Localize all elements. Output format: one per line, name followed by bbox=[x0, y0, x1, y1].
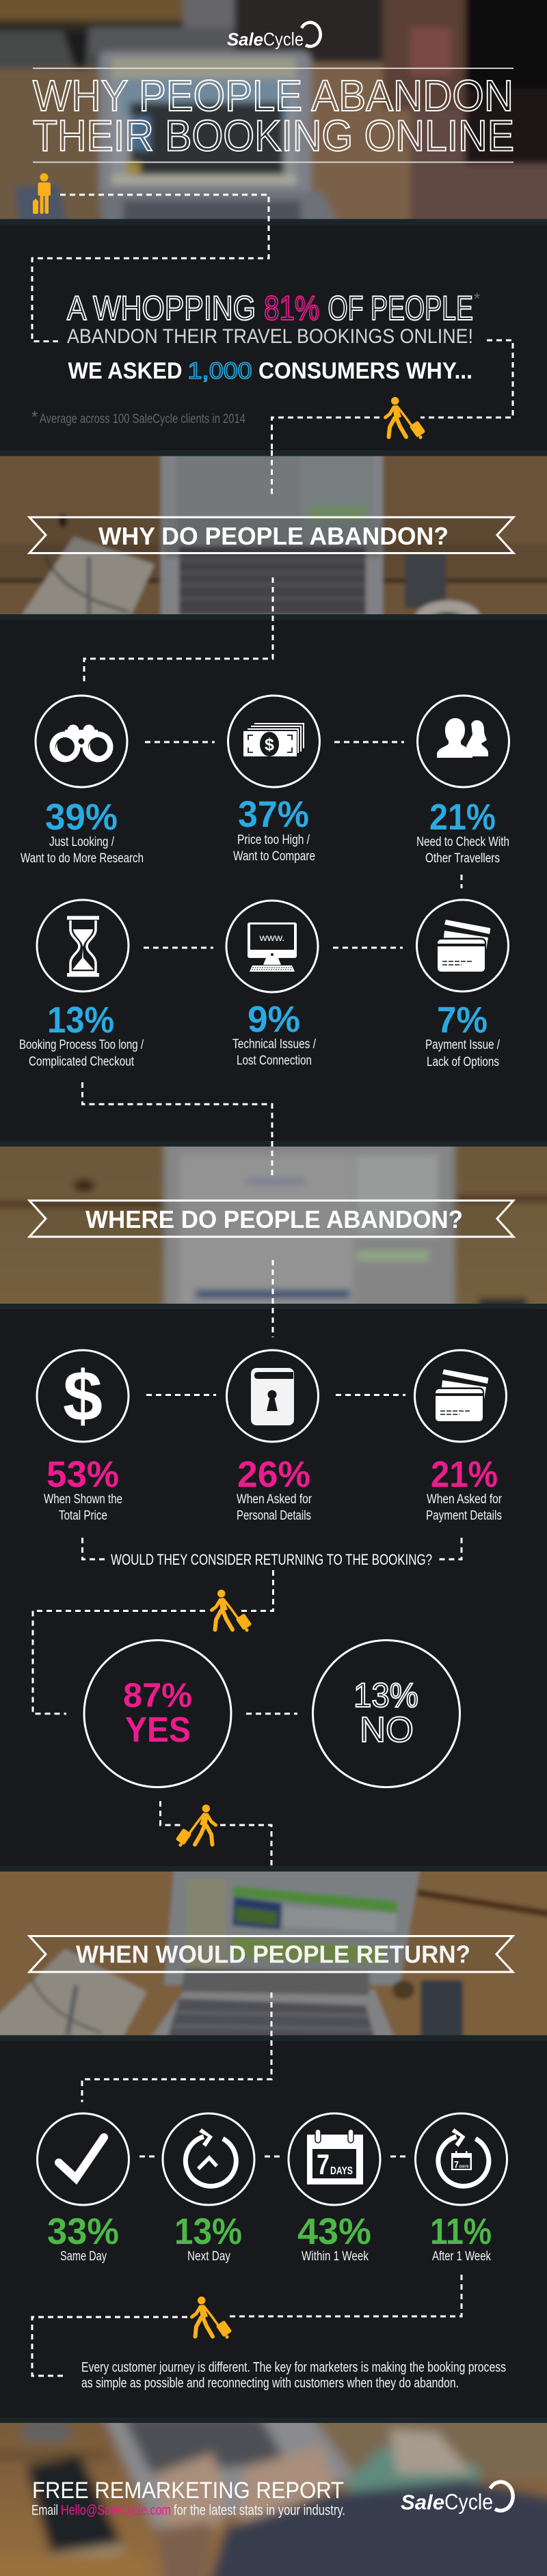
headline: 81 percent: 81% bbox=[264, 289, 319, 327]
logo: SaleCycle top: Sale bbox=[227, 29, 263, 49]
stat: 37 percent: Want to Compare bbox=[233, 849, 315, 864]
stat: after one week: After 1 Week bbox=[432, 2249, 491, 2264]
headline: 81 percent: A WHOPPING bbox=[67, 289, 256, 327]
stat: 26 percent bbox=[227, 1350, 319, 1523]
icon: desktop computer bbox=[248, 922, 297, 972]
panel: intro statistic bbox=[31, 289, 480, 426]
contact line: for the latest stats in your industry. bbox=[174, 2502, 345, 2519]
stat: next day bbox=[163, 2113, 254, 2264]
stat: 39 percent: Just Looking / bbox=[49, 835, 115, 849]
icon: seven day calendar: 7 bbox=[317, 2148, 330, 2180]
footnote: Average across 100 SaleCycle clients in 2014 bbox=[40, 412, 245, 426]
icon: refresh arrow with calendar bbox=[438, 2128, 489, 2187]
icon: seven day calendar bbox=[307, 2129, 363, 2184]
stat: 21 percent: When Asked for bbox=[427, 1492, 503, 1507]
closing text bbox=[81, 2360, 506, 2391]
closing text: as simple as possible and reconnecting with customers when they do abandon. bbox=[81, 2376, 459, 2391]
stat: 21 percent: Other Travellers bbox=[425, 851, 500, 866]
icon: refresh arrow with caret bbox=[185, 2128, 236, 2187]
stat: within one week: 43% bbox=[297, 2211, 371, 2252]
icon: walking traveller bbox=[212, 1589, 252, 1632]
stat: 7 percent: Payment Issue / bbox=[425, 1038, 501, 1052]
icon: refresh arrow with calendar: DAYS bbox=[459, 2165, 469, 2169]
header photo bbox=[0, 0, 547, 219]
stat: 39 percent bbox=[21, 696, 144, 866]
dashed path: return stats to closing text bbox=[32, 2275, 462, 2376]
stat: 7 percent: Lack of Options bbox=[427, 1055, 499, 1069]
icon: payment cards bbox=[436, 920, 490, 973]
stat: 13 percent: Booking Process Too long / bbox=[19, 1038, 144, 1052]
consumer count line: 1,000 bbox=[187, 358, 252, 384]
panel: why people abandon stats bbox=[19, 696, 509, 1069]
photo: hands typing on laptop bbox=[0, 2423, 547, 2576]
stat: 7 percent bbox=[417, 900, 509, 1069]
stat: 9 percent bbox=[226, 901, 318, 1068]
stat: 13 percent bbox=[19, 900, 144, 1069]
logo: SaleCycle top: Cycle bbox=[263, 29, 304, 49]
dashed path: traveller to intro bbox=[32, 195, 269, 342]
dashed line into banner two bbox=[271, 1141, 274, 1177]
stat: 26 percent: Personal Details bbox=[237, 1509, 311, 1523]
stat: 13 percent: Complicated Checkout bbox=[29, 1055, 135, 1069]
stat: after one week bbox=[416, 2113, 507, 2264]
question heading: WOULD THEY CONSIDER RETURNING TO THE BOOKING? bbox=[111, 1551, 432, 1568]
banner: when would people return bbox=[29, 1936, 513, 1972]
dashed paths to question bbox=[82, 1537, 462, 1559]
headline: 81 percent: * bbox=[474, 290, 480, 308]
dashed path: banner two to stats bbox=[272, 1260, 274, 1337]
contact line: Hello@SaleCycle.com bbox=[61, 2502, 171, 2519]
icon: desktop computer: www. bbox=[258, 932, 284, 943]
stat: after one week: 11% bbox=[430, 2211, 492, 2252]
icon: standing traveller bbox=[33, 174, 51, 214]
stat: 9 percent: Lost Connection bbox=[237, 1054, 312, 1068]
footnote: * bbox=[31, 408, 38, 426]
stat: same day bbox=[37, 2113, 129, 2264]
icon: hourglass bbox=[67, 916, 99, 977]
icon: walking traveller bbox=[386, 397, 425, 439]
icon: walking traveller mirrored bbox=[176, 1805, 216, 1847]
stat: 53 percent bbox=[37, 1350, 129, 1523]
contact line bbox=[31, 2502, 345, 2519]
stat: 37 percent bbox=[228, 696, 320, 864]
panel: no answer bbox=[313, 1640, 459, 1787]
stat: same day: 33% bbox=[47, 2211, 119, 2252]
stat: 21 percent: Need to Check With bbox=[416, 835, 509, 849]
title: WHY PEOPLE ABANDON bbox=[33, 71, 513, 120]
icon: locked book bbox=[251, 1368, 294, 1425]
connector dashes between where stats bbox=[146, 1394, 405, 1396]
banner: where do people abandon bbox=[29, 1201, 513, 1237]
logo: SaleCycle bottom bbox=[401, 2482, 513, 2515]
consumer count line bbox=[68, 358, 472, 384]
section divider band bbox=[0, 219, 547, 225]
stat: 9 percent: Technical Issues / bbox=[232, 1037, 317, 1052]
panel: no answer: NO bbox=[360, 1710, 414, 1750]
headline: 81 percent bbox=[67, 289, 480, 327]
panel: yes answer: 87% bbox=[123, 1676, 192, 1714]
title: THEIR BOOKING ONLINE bbox=[33, 111, 514, 160]
consumer count line: WE ASKED bbox=[68, 358, 182, 384]
icon: payment cards bbox=[434, 1369, 488, 1423]
icon: seven day calendar: DAYS bbox=[330, 2165, 353, 2177]
icon: binoculars bbox=[49, 724, 114, 763]
banner: where do people abandon: WHERE DO PEOPLE ABANDON? bbox=[85, 1205, 463, 1233]
footnote bbox=[31, 408, 245, 426]
stat: 26 percent: When Asked for bbox=[237, 1492, 312, 1507]
banner: why do people abandon: WHY DO PEOPLE ABANDON? bbox=[98, 522, 449, 550]
dashed path: question to answers bbox=[33, 1570, 274, 1714]
dashed path: yes to banner three bbox=[160, 1801, 271, 1919]
stat: 53 percent: Total Price bbox=[59, 1509, 107, 1523]
stat: 21 percent bbox=[416, 696, 509, 866]
stat: 21 percent: 21% bbox=[429, 797, 496, 838]
logo: SaleCycle top bbox=[227, 23, 321, 49]
band bbox=[0, 1141, 547, 1147]
photo: tablet on wood bbox=[0, 1147, 547, 1304]
icon: banknotes: $ bbox=[265, 735, 274, 754]
icon: tick bbox=[59, 2137, 104, 2178]
connector dashes between why stats bbox=[144, 742, 462, 948]
stat: 9 percent: 9% bbox=[248, 999, 300, 1040]
band bbox=[0, 1304, 547, 1309]
connector dashes between return stats bbox=[139, 2155, 405, 2158]
dashed path: banner one to first stat bbox=[84, 577, 273, 685]
panel: yes answer bbox=[84, 1640, 231, 1787]
heading: free remarketing report: FREE REMARKETING REPORT bbox=[32, 2478, 344, 2504]
connector dashes between answers bbox=[246, 1712, 297, 1715]
stat: 53 percent: 53% bbox=[46, 1454, 119, 1495]
band bbox=[0, 1866, 547, 1872]
stat: same day: Same Day bbox=[60, 2249, 107, 2264]
icon: refresh arrow with calendar: 7 bbox=[454, 2159, 459, 2170]
banner: when would people return: WHEN WOULD PEOPLE RETURN? bbox=[76, 1941, 470, 1968]
stat: within one week bbox=[289, 2113, 380, 2264]
panel: yes answer: YES bbox=[125, 1710, 191, 1750]
stat: 39 percent: Want to do More Research bbox=[21, 851, 144, 866]
subheading: ABANDON THEIR TRAVEL BOOKINGS ONLINE! bbox=[67, 325, 473, 348]
stat: 37 percent: Price too High / bbox=[237, 833, 310, 847]
icon: two people bbox=[437, 717, 488, 760]
dashed path: stats to banner two bbox=[82, 1082, 272, 1177]
stat: 7 percent: 7% bbox=[437, 1000, 488, 1041]
stat: within one week: Within 1 Week bbox=[302, 2249, 369, 2264]
stat: 21 percent: 21% bbox=[431, 1454, 498, 1495]
icon: banknotes bbox=[243, 724, 304, 756]
stat: 21 percent bbox=[414, 1350, 506, 1523]
photo: laptop with booking site bbox=[0, 1872, 547, 2035]
dashed path: banner three to return stats bbox=[82, 1992, 271, 2102]
band bbox=[0, 450, 547, 456]
banner: why do people abandon bbox=[29, 517, 513, 553]
photo: laptop on desk bbox=[0, 456, 547, 614]
logo: SaleCycle bottom: Cycle bbox=[444, 2490, 493, 2515]
dashed line into banner one bbox=[271, 450, 273, 495]
stat: 26 percent: 26% bbox=[237, 1454, 310, 1495]
icon: dollar sign: $ bbox=[63, 1357, 103, 1436]
band bbox=[0, 614, 547, 620]
stat: next day: Next Day bbox=[187, 2249, 230, 2264]
icon: walking traveller bbox=[191, 2297, 232, 2339]
dashed path: intro to first banner bbox=[272, 340, 513, 495]
stat: 13 percent: 13% bbox=[47, 1000, 114, 1041]
logo: SaleCycle bottom: Sale bbox=[401, 2490, 444, 2515]
band bbox=[0, 2035, 547, 2041]
band bbox=[0, 2417, 547, 2423]
consumer count line: CONSUMERS WHY... bbox=[258, 358, 472, 384]
stat: next day: 13% bbox=[174, 2211, 242, 2252]
panel: where people abandon stats bbox=[37, 1350, 506, 1523]
headline: 81 percent: OF PEOPLE bbox=[328, 289, 473, 327]
contact line: Email bbox=[31, 2502, 58, 2519]
panel: no answer: 13% bbox=[353, 1676, 418, 1714]
stat: 53 percent: When Shown the bbox=[44, 1492, 122, 1507]
panel: footer call to action bbox=[31, 2478, 513, 2519]
stat: 21 percent: Payment Details bbox=[426, 1509, 502, 1523]
panel: when people return stats bbox=[37, 2113, 507, 2264]
stat: 37 percent: 37% bbox=[238, 794, 309, 835]
stat: 39 percent: 39% bbox=[45, 797, 118, 838]
title bbox=[33, 68, 514, 163]
